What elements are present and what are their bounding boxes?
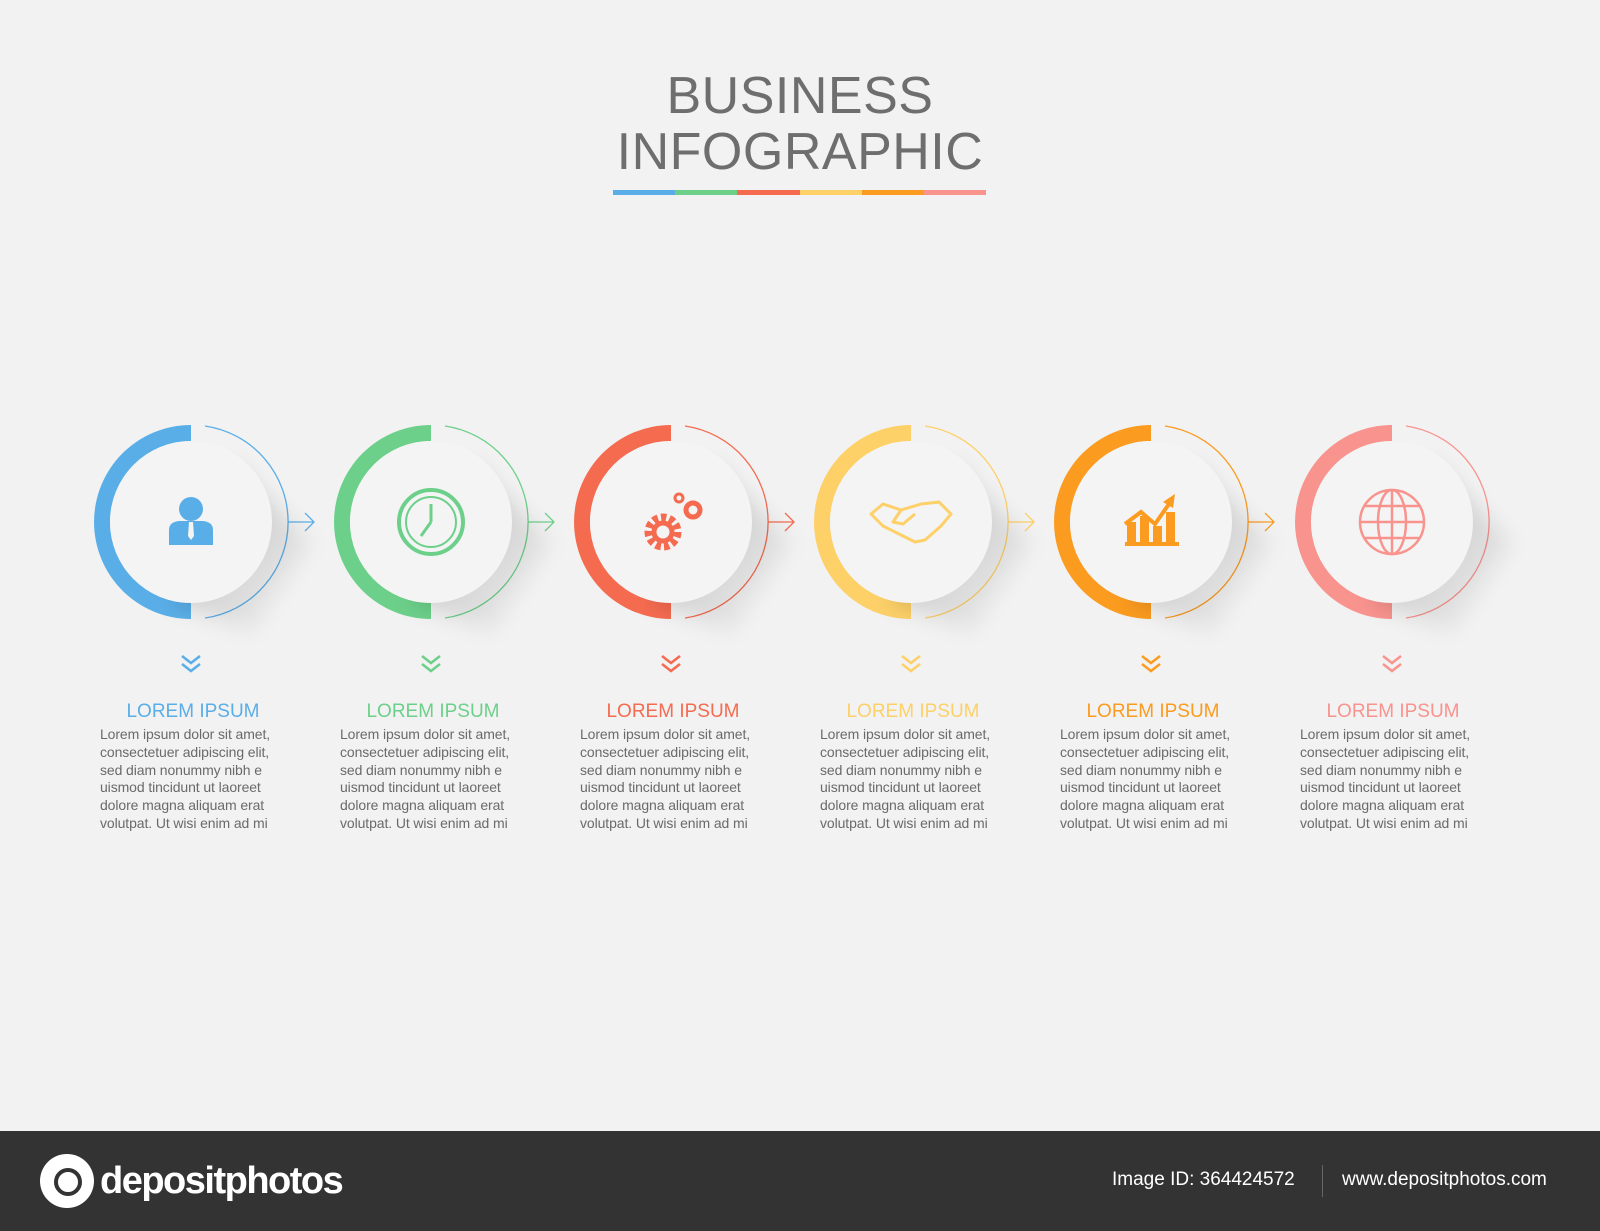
footer logo: depositphotos bbox=[100, 1160, 342, 1202]
icon: gears bbox=[649, 494, 700, 546]
footer image id: Image ID: 364424572 bbox=[1112, 1169, 1295, 1190]
title underline color bar bbox=[613, 190, 986, 195]
step 4 circle bbox=[814, 425, 1034, 632]
title: INFOGRAPHIC bbox=[617, 123, 983, 181]
footer bar bbox=[0, 1131, 1600, 1231]
title: BUSINESS bbox=[666, 67, 933, 125]
step 1 circle bbox=[94, 425, 314, 632]
chevrons bbox=[182, 656, 1401, 671]
icon: globe bbox=[1360, 490, 1424, 554]
step 5 circle bbox=[1054, 425, 1274, 632]
text column 1: LOREM IPSUM bbox=[126, 701, 260, 722]
footer logo bbox=[40, 1154, 342, 1208]
text column 3: Lorem ipsum dolor sit amet, consectetuer adipiscing elit, sed diam nonummy nibh e uismod tincidunt ut laoreet dolore magna aliquam erat volutpat. Ut wisi enim ad mi bbox=[580, 726, 750, 831]
icon: chart bbox=[1125, 494, 1179, 546]
text column 6: LOREM IPSUM bbox=[1326, 701, 1460, 722]
step 6 circle bbox=[1295, 425, 1512, 632]
title bbox=[617, 67, 983, 181]
step 3 circle bbox=[574, 425, 794, 632]
text column 5: LOREM IPSUM bbox=[1086, 701, 1220, 722]
icon: handshake bbox=[871, 502, 951, 542]
text column 2: Lorem ipsum dolor sit amet, consectetuer adipiscing elit, sed diam nonummy nibh e uismod tincidunt ut laoreet dolore magna aliquam erat volutpat. Ut wisi enim ad mi bbox=[340, 726, 510, 831]
process circles bbox=[94, 425, 1508, 673]
text column 2: LOREM IPSUM bbox=[366, 701, 500, 722]
icon: person bbox=[169, 497, 213, 545]
text column 5: Lorem ipsum dolor sit amet, consectetuer adipiscing elit, sed diam nonummy nibh e uismod tincidunt ut laoreet dolore magna aliquam erat volutpat. Ut wisi enim ad mi bbox=[1060, 726, 1230, 831]
text column 6: Lorem ipsum dolor sit amet, consectetuer adipiscing elit, sed diam nonummy nibh e uismod tincidunt ut laoreet dolore magna aliquam erat volutpat. Ut wisi enim ad mi bbox=[1300, 726, 1470, 831]
footer url: www.depositphotos.com bbox=[1342, 1169, 1547, 1190]
text column 3: LOREM IPSUM bbox=[606, 701, 740, 722]
text column 4: Lorem ipsum dolor sit amet, consectetuer adipiscing elit, sed diam nonummy nibh e uismod tincidunt ut laoreet dolore magna aliquam erat volutpat. Ut wisi enim ad mi bbox=[820, 726, 990, 831]
text column 4: LOREM IPSUM bbox=[846, 701, 980, 722]
step 2 circle bbox=[334, 425, 554, 632]
text column 1: Lorem ipsum dolor sit amet, consectetuer adipiscing elit, sed diam nonummy nibh e uismod tincidunt ut laoreet dolore magna aliquam erat volutpat. Ut wisi enim ad mi bbox=[100, 726, 270, 831]
icon: clock bbox=[399, 490, 463, 554]
